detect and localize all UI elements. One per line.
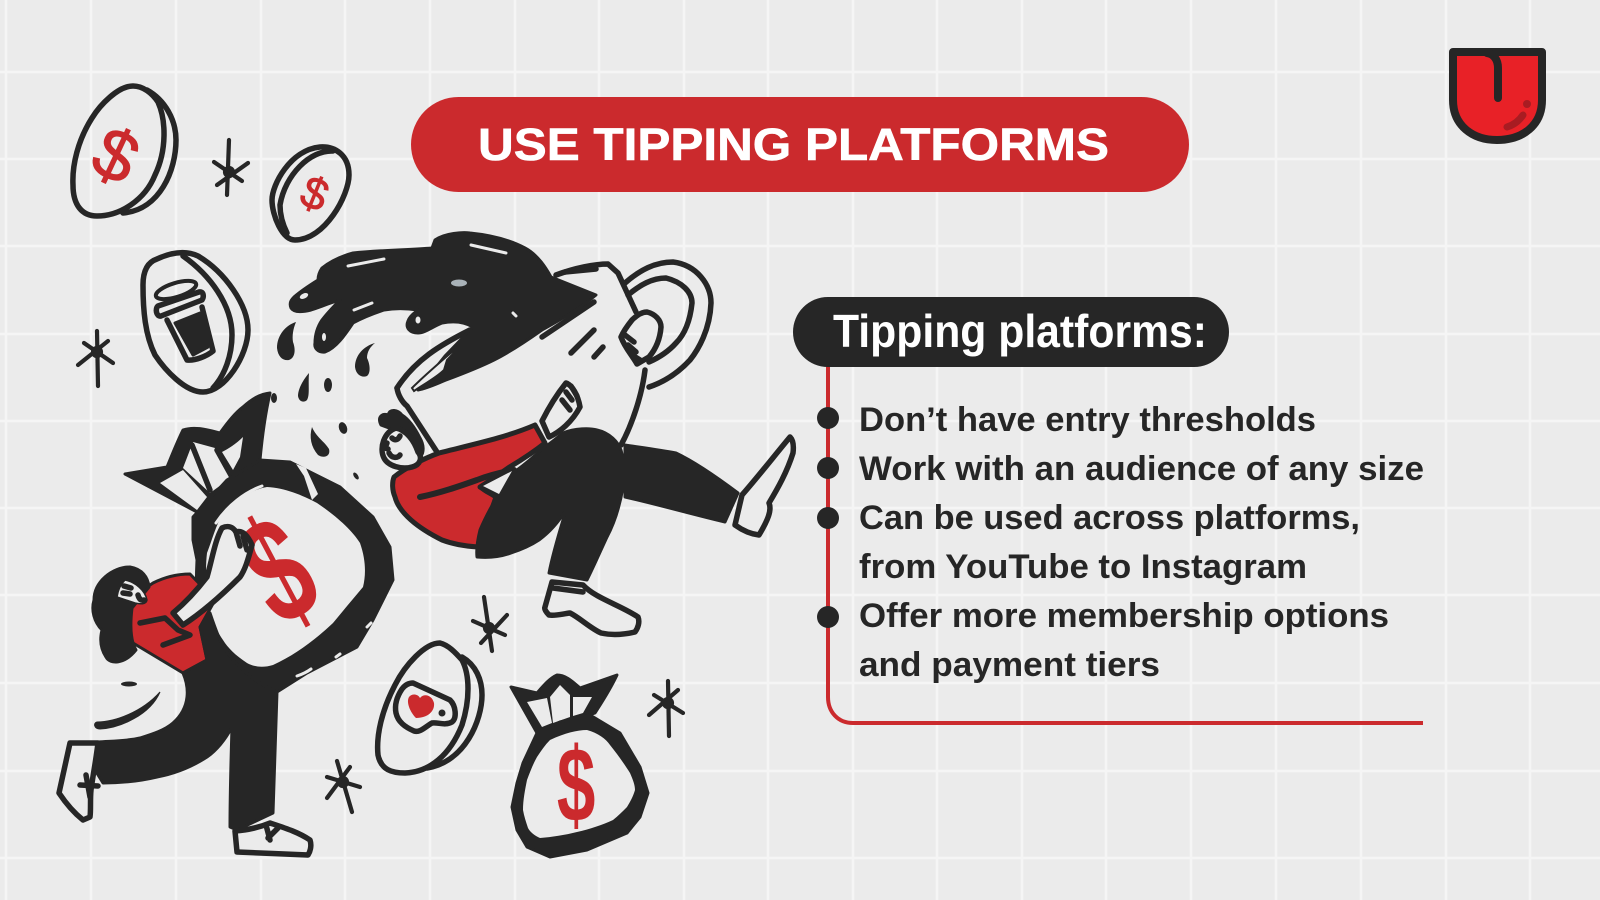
pants front leg [477, 429, 624, 580]
bullet list: Work with an audience of any size [859, 450, 1424, 488]
woman back shoe [59, 743, 98, 820]
woman arm [173, 527, 252, 625]
hand on handle [621, 312, 661, 364]
illustration: giant coffee cup [397, 262, 711, 452]
bullet list: Don’t have entry thresholds [859, 401, 1316, 439]
dollar on small bag: $ [557, 725, 595, 843]
bullet list: Can be used across platforms, [859, 499, 1360, 537]
back leg [625, 445, 738, 522]
icon: dollar coin large [73, 86, 176, 216]
icon: dollar coin small: $ [294, 165, 336, 222]
head [380, 410, 423, 468]
woman top [128, 574, 215, 673]
illustration: coffee splash [290, 233, 596, 391]
ink drops [271, 322, 375, 480]
bullet list: from YouTube to Instagram [859, 548, 1307, 586]
bag crown [125, 393, 270, 512]
bag body [193, 460, 393, 694]
icon: heart mug coin [378, 643, 482, 773]
bullet list: Offer more membership options [859, 597, 1389, 635]
title pill: USE TIPPING PLATFORMS [478, 119, 1109, 170]
bullet list [817, 401, 1424, 684]
title pill [411, 97, 1189, 192]
red torso [393, 425, 545, 547]
illustration: small money bag [511, 675, 648, 857]
hand on cup [542, 383, 580, 437]
icon: dollar coin large: $ [81, 111, 151, 201]
sparkles [78, 140, 683, 812]
icon: dollar coin small [272, 147, 349, 240]
woman hair and head [93, 567, 149, 662]
woman front shoe [235, 823, 311, 855]
dollar on big bag: $ [214, 483, 342, 659]
front shoe [545, 582, 639, 634]
panel: tipping platforms list [793, 297, 1424, 723]
icon: coffee cup coin [143, 253, 248, 392]
subheading pill: Tipping platforms: [833, 305, 1207, 357]
woman pants [95, 613, 277, 830]
illustration: big money bag and woman [59, 393, 393, 855]
timeline line [828, 365, 1423, 723]
back shoe [735, 437, 793, 535]
cup handle [625, 262, 711, 387]
motion lines [95, 692, 160, 729]
logo [1453, 52, 1542, 140]
bullet list: and payment tiers [859, 646, 1160, 684]
subheading pill [793, 297, 1229, 367]
illustration: man carrying cup [380, 312, 793, 634]
